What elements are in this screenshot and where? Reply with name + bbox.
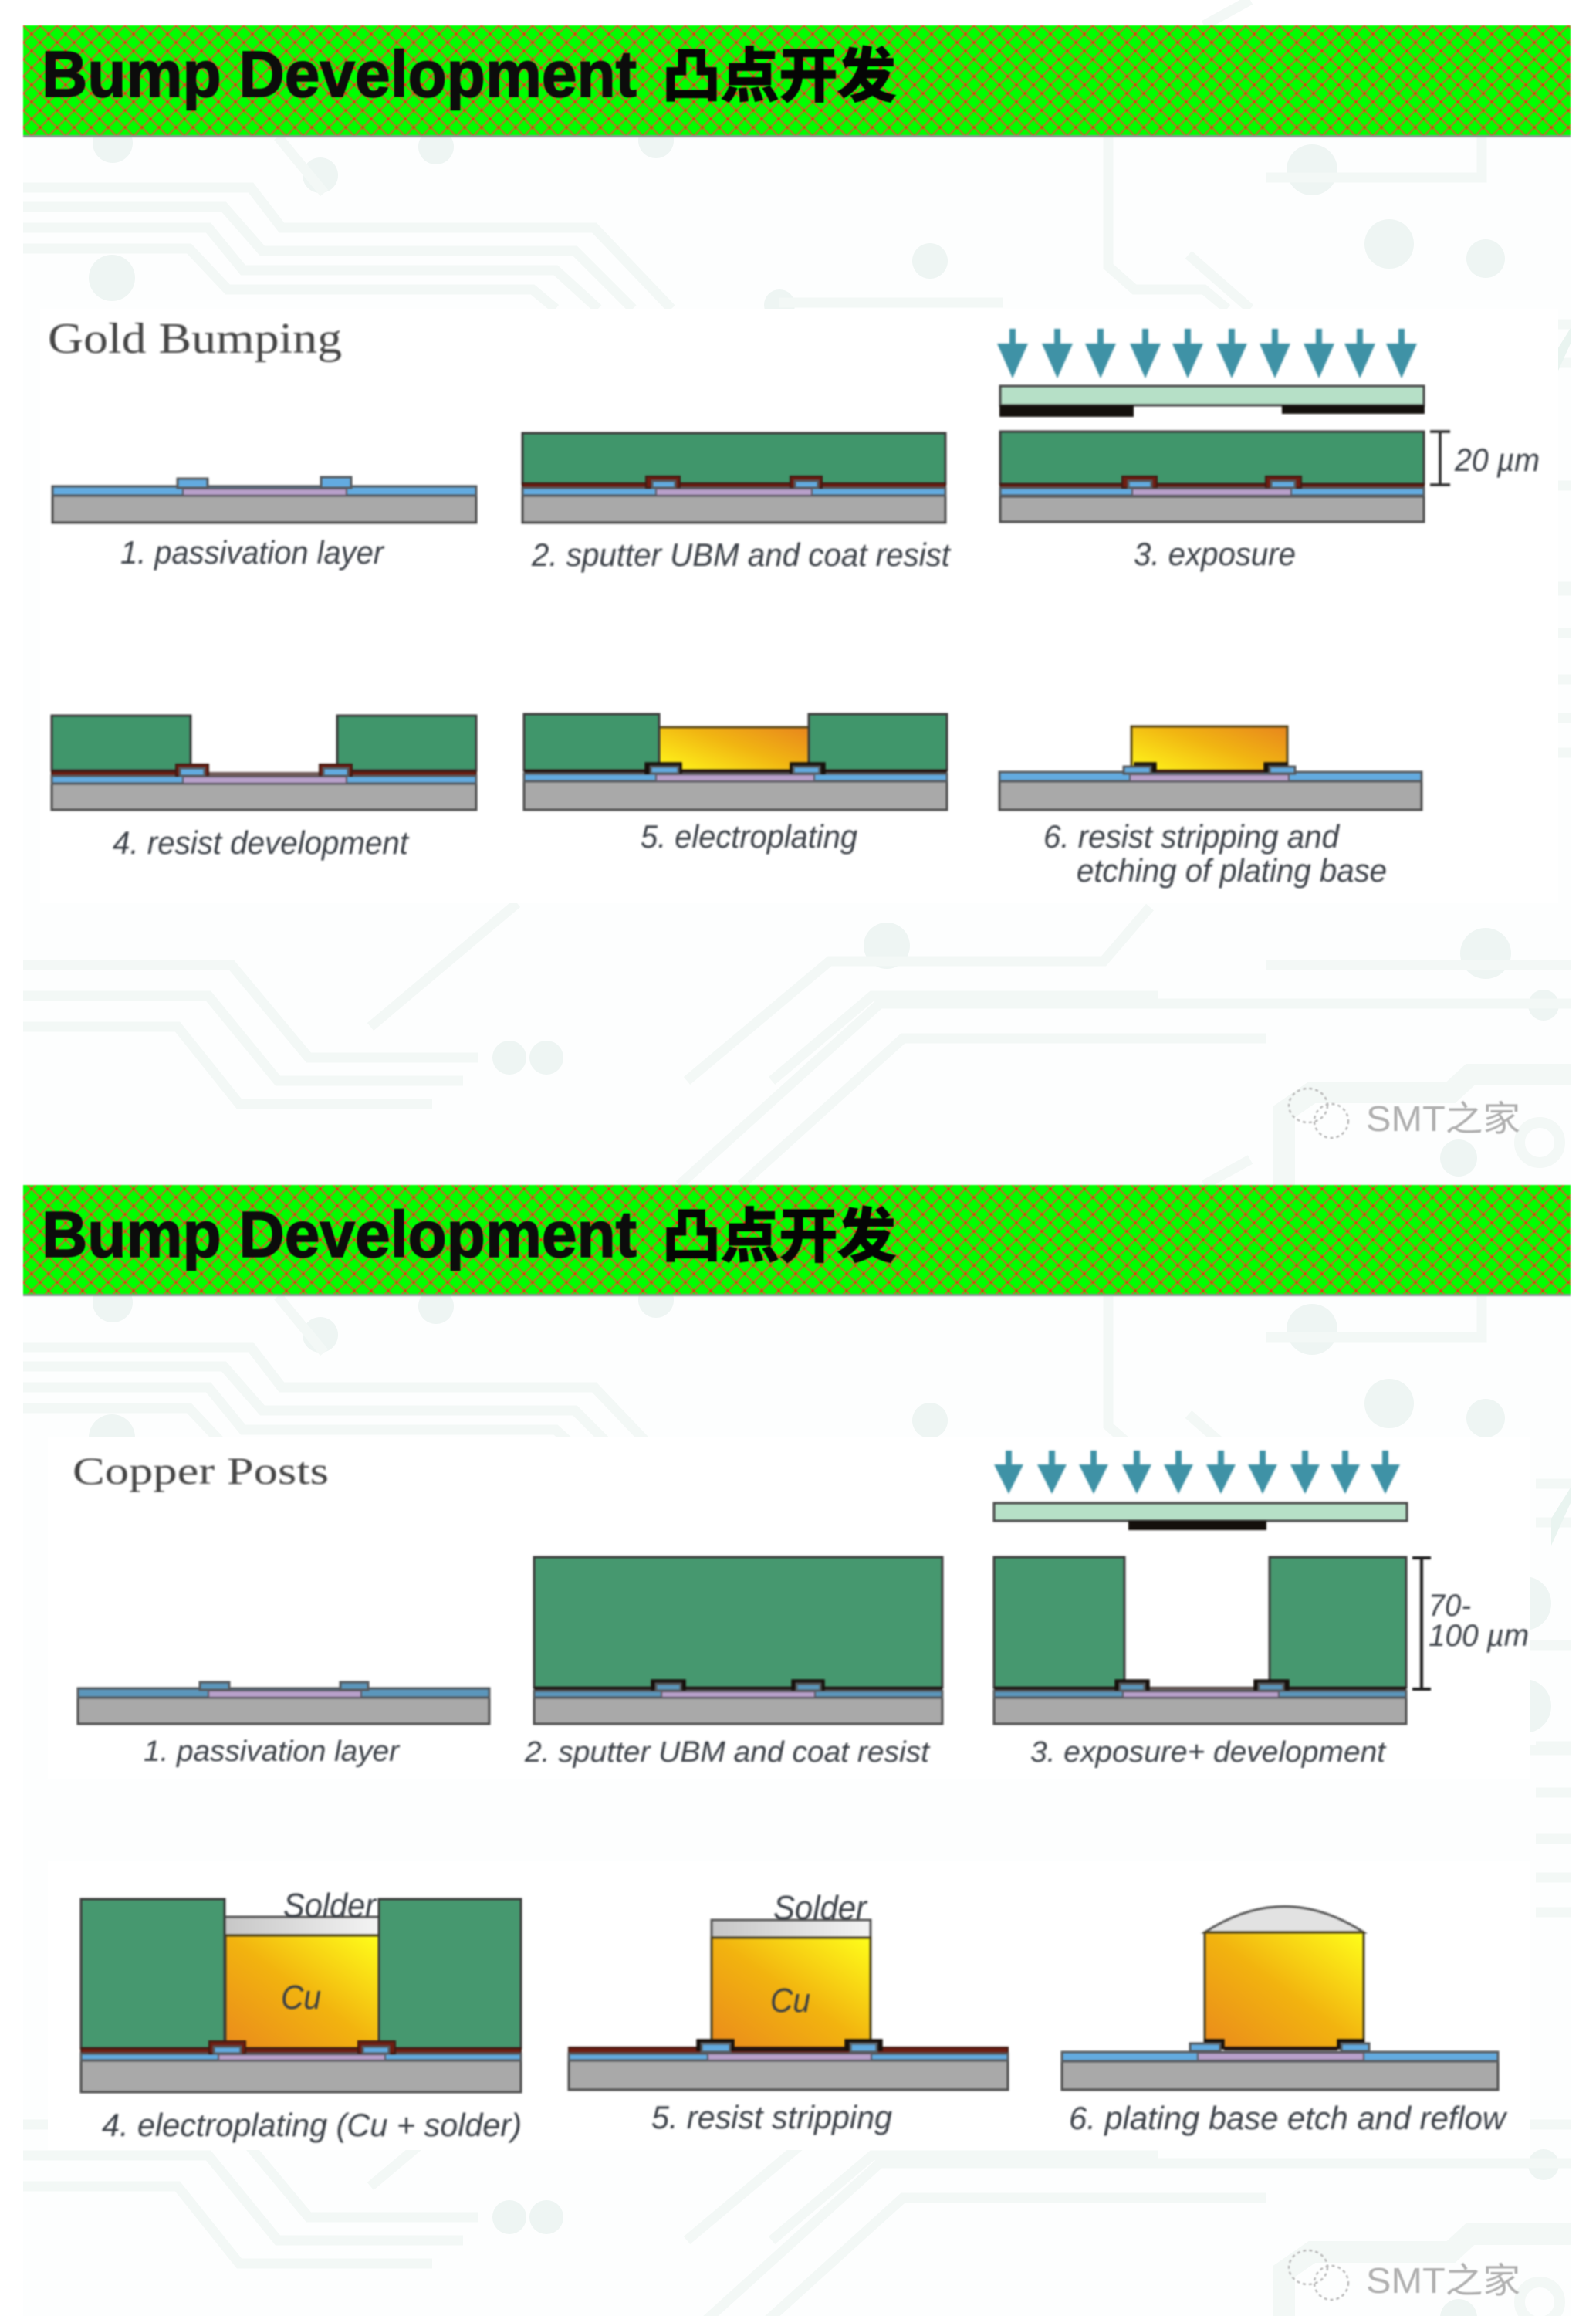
dimension label: 70-100 um: 100 µm <box>1429 1619 1529 1653</box>
gold bump <box>659 727 809 770</box>
heading: Copper Posts: Copper Posts <box>73 1449 329 1492</box>
caption: 1. passivation layer <box>144 1735 400 1768</box>
label: Solder: Solder <box>773 1889 868 1927</box>
caption: 2. sputter UBM and coat resist <box>524 1736 930 1769</box>
copper post <box>712 1938 871 2048</box>
panel: gold step 3 exposure <box>997 329 1540 572</box>
solder dome <box>1205 1907 1364 1932</box>
title: Chinese: 凸点开发 <box>662 44 896 110</box>
dimension bracket <box>1430 432 1450 485</box>
dimension label: 70-100 um: 70- <box>1429 1589 1471 1623</box>
panel: gold step 5 electroplating <box>524 714 947 855</box>
gold bump <box>1131 726 1287 772</box>
solder cap <box>223 1917 379 1935</box>
caption: 6. plating base etch and reflow <box>1069 2100 1508 2136</box>
icon: chat bubbles <box>1289 1089 1348 1138</box>
caption: etching of plating base <box>1077 852 1387 889</box>
caption: 2. sputter UBM and coat resist <box>531 537 952 573</box>
title: Bump Development: Bump Development <box>42 38 637 110</box>
dimension label: 20 um: 20 µm <box>1454 442 1540 478</box>
copper post <box>1205 1932 1364 2048</box>
header banner: top slide <box>23 25 1571 137</box>
panel: copper step 2 sputter UBM and coat resist <box>524 1557 942 1769</box>
caption <box>1043 818 1387 889</box>
photomask <box>999 386 1425 417</box>
panel: gold step 6 resist stripping and etching <box>999 726 1422 889</box>
label: Cu: Cu <box>281 1979 321 2016</box>
caption: 5. electroplating <box>641 818 857 855</box>
watermark: bottom slide <box>1289 2250 1520 2301</box>
watermark: bottom slide: SMT之家 <box>1366 2260 1520 2301</box>
label: Solder: Solder <box>283 1887 377 1925</box>
label: Cu: Cu <box>770 1982 810 2020</box>
caption: 3. exposure+ development <box>1030 1736 1386 1769</box>
solder cap <box>712 1920 871 1938</box>
panel: gold step 4 resist development <box>52 716 476 861</box>
caption: 4. electroplating (Cu + solder) <box>102 2107 522 2143</box>
caption: 4. resist development <box>113 824 410 861</box>
watermark: top slide <box>1289 1089 1520 1139</box>
icon: chat bubbles <box>1289 2250 1348 2300</box>
panel: copper step 6 plating base etch and reflow <box>1062 1907 1508 2136</box>
panel: copper step 3 exposure and development <box>994 1451 1529 1769</box>
caption: 5. resist stripping <box>651 2099 892 2135</box>
caption: 1. passivation layer <box>120 534 385 571</box>
arrows: exposure light <box>994 1451 1400 1494</box>
watermark: top slide: SMT之家 <box>1366 1099 1520 1139</box>
dimension label: 70-100 um <box>1429 1589 1529 1653</box>
title: Bump Development: Bump Development <box>42 1198 637 1271</box>
header banner: bottom slide <box>23 1185 1571 1296</box>
heading: Gold Bumping: Gold Bumping <box>48 315 342 363</box>
photomask <box>994 1503 1407 1530</box>
dimension bracket <box>1412 1558 1431 1689</box>
panel: copper step 1 passivation layer <box>78 1682 489 1768</box>
arrows: exposure light <box>997 329 1417 378</box>
panel: gold step 1 passivation layer <box>52 477 476 571</box>
panel: gold step 2 sputter UBM and coat resist <box>522 433 952 573</box>
title: Chinese: 凸点开发 <box>662 1204 896 1270</box>
copper post <box>225 1935 379 2048</box>
panel: copper step 5 resist stripping <box>569 1889 1008 2135</box>
caption: 6. resist stripping and <box>1043 818 1341 855</box>
caption: 3. exposure <box>1134 536 1296 572</box>
panel: copper step 4 electroplating Cu and solder <box>81 1887 522 2143</box>
